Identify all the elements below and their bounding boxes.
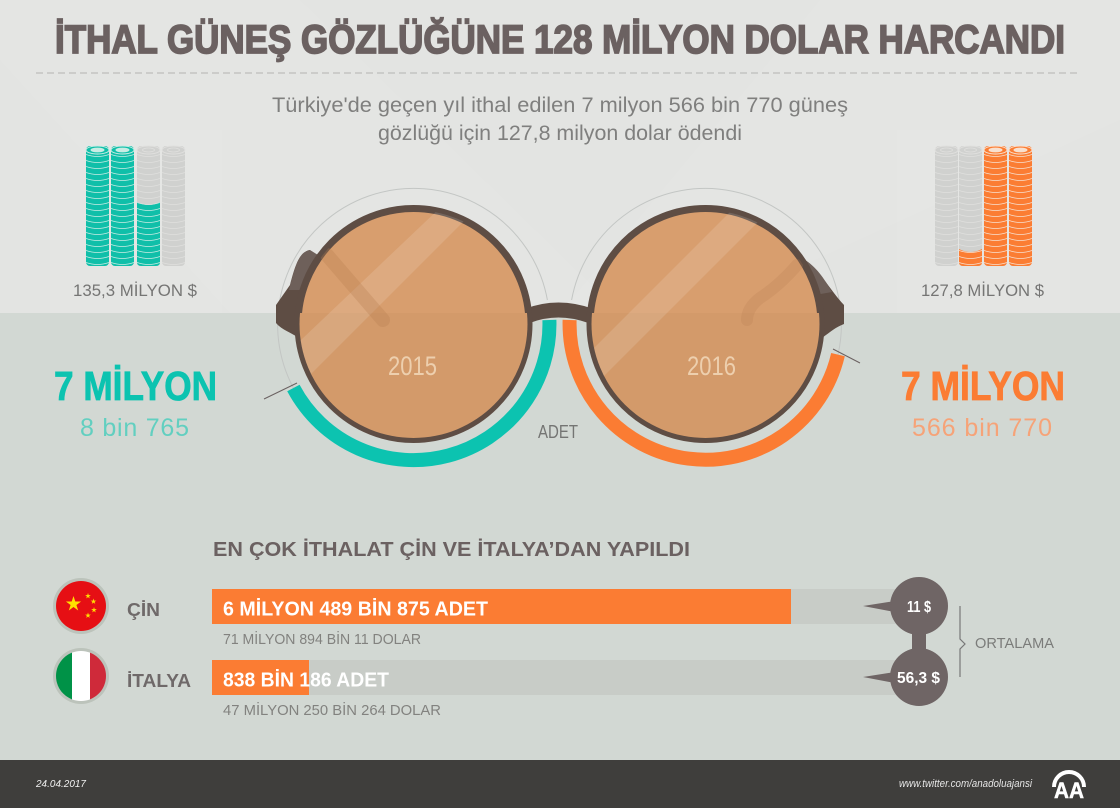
bar note: China: 71 MİLYON 894 BİN 11 DOLAR xyxy=(223,630,421,648)
orange ring: 2016 quantity xyxy=(570,320,838,460)
left lens xyxy=(283,205,540,443)
bridge xyxy=(527,310,591,316)
price bubble: China xyxy=(863,577,948,635)
flag: Italy xyxy=(53,648,109,704)
bar note: Italy: 47 MİLYON 250 BİN 264 DOLAR xyxy=(223,701,441,719)
value: 2016 xyxy=(901,363,1065,442)
brace xyxy=(960,606,965,677)
value: 2015: 7 MİLYON xyxy=(54,363,217,409)
price bubble: Italy xyxy=(863,648,948,706)
value: 2016: 566 bin 770 xyxy=(912,414,1052,442)
coin stacks: 2015 xyxy=(86,146,185,266)
subtitle text: gözlüğü için 127,8 milyon dolar ödendi xyxy=(378,122,742,145)
average label: ORTALAMA xyxy=(975,635,1054,652)
subtitle text xyxy=(272,94,848,145)
bar: China xyxy=(212,589,897,624)
background: lower area xyxy=(0,313,1120,760)
leader line: 2015 xyxy=(264,383,297,399)
value: 2015: 8 bin 765 xyxy=(80,414,189,442)
date: 24.04.2017 xyxy=(35,779,86,790)
connector between price bubbles xyxy=(912,630,926,655)
glasses xyxy=(276,205,844,443)
flag: China xyxy=(53,578,109,634)
price bubble: Italy: 56,3 $ xyxy=(897,670,940,687)
right temple xyxy=(795,260,844,338)
year label: 2015: 2015 xyxy=(388,351,437,381)
coin label: 2015: 135,3 MİLYON $ xyxy=(73,281,198,300)
source url: www.twitter.com/anadoluajansi xyxy=(899,778,1032,790)
subtitle text: Türkiye'de geçen yıl ithal edilen 7 milyon 566 bin 770 güneş xyxy=(272,94,848,117)
bar: Italy xyxy=(212,660,897,695)
coin stacks: 2016 xyxy=(935,146,1032,266)
thin arc: 2015 xyxy=(278,188,547,388)
country label: Italy: İTALYA xyxy=(127,671,191,691)
icon: AA logo: AA xyxy=(1054,778,1084,803)
background: upper area xyxy=(0,0,1120,313)
price bubble: China: 11 $ xyxy=(907,599,931,616)
value: 2016: 7 MİLYON xyxy=(901,363,1065,409)
year label: 2016: 2016 xyxy=(687,351,736,381)
footer xyxy=(0,760,1120,808)
section heading: EN ÇOK İTHALAT ÇİN VE İTALYA’DAN YAPILDI xyxy=(213,538,690,561)
value: 2015 xyxy=(54,363,217,442)
leader line: 2016 xyxy=(833,349,860,363)
bar: Italy: 838 BİN 186 ADET xyxy=(223,668,389,692)
left temple xyxy=(276,250,325,337)
teal ring: 2015 quantity xyxy=(293,320,549,460)
bar: China: 6 MİLYON 489 BİN 875 ADET xyxy=(223,598,488,620)
coin label: 2016: 127,8 MİLYON $ xyxy=(921,281,1045,300)
thin arc: 2016 xyxy=(572,188,841,355)
unit label: ADET xyxy=(538,422,578,442)
country label: China: ÇİN xyxy=(127,600,160,620)
right lens xyxy=(582,205,832,443)
